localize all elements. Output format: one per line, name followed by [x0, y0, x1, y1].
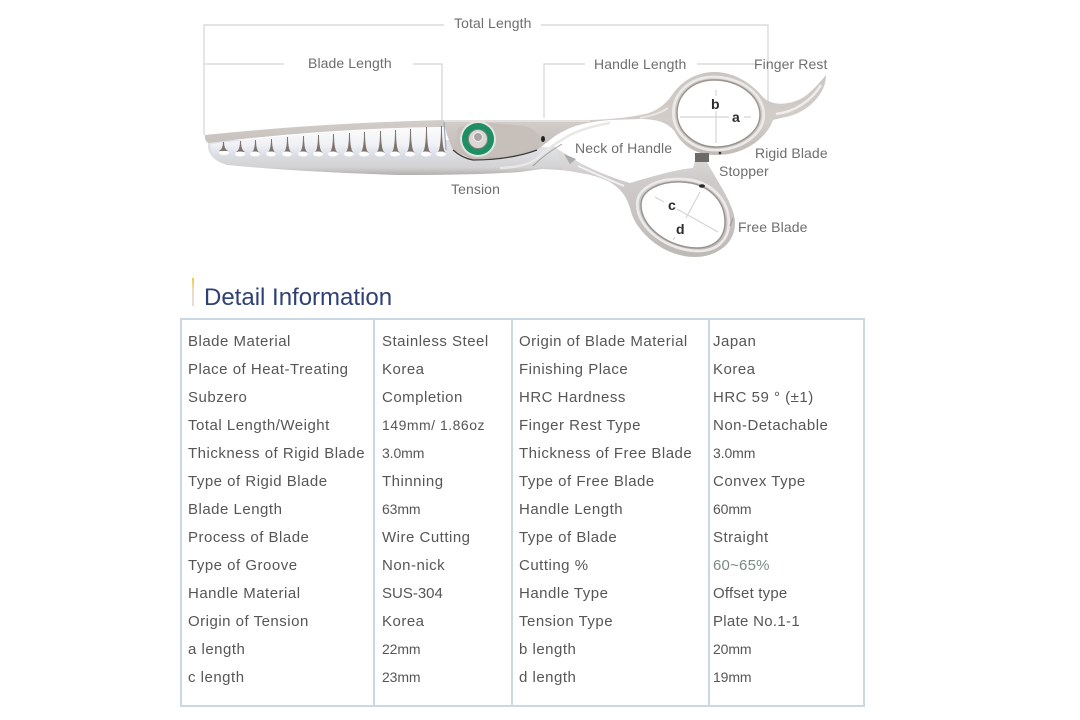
row: groove: 60~65%: [713, 557, 770, 574]
label: Handle Length: Handle Length: [594, 56, 686, 72]
row: process: [188, 529, 769, 546]
row: process: Process of Blade: [188, 529, 309, 546]
free blade and lower handle: [208, 140, 735, 257]
label: Free Blade: Free Blade: [738, 219, 808, 235]
row: subzero: Subzero: [188, 389, 247, 406]
row: subzero: HRC Hardness: [519, 389, 626, 406]
row: blade type: [188, 473, 806, 490]
dimension lines: [204, 25, 768, 240]
row: tension: Origin of Tension: [188, 613, 309, 630]
row: thickness: Thickness of Rigid Blade: [188, 445, 365, 462]
row: tension: [188, 613, 800, 630]
row: total length: Finger Rest Type: [519, 417, 641, 434]
row: subzero: [188, 389, 814, 406]
row: process: Type of Blade: [519, 529, 617, 546]
row: lengths: Blade Length: [188, 501, 282, 518]
row: handle: [188, 585, 787, 602]
row: process: Straight: [713, 529, 769, 546]
label: Finger Rest: Finger Rest: [754, 56, 827, 72]
row: blade material: Stainless Steel: [382, 333, 489, 350]
row: tension: Tension Type: [519, 613, 613, 630]
row: total length: [188, 417, 828, 434]
row: blade type: Type of Free Blade: [519, 473, 655, 490]
row: blade material: Japan: [713, 333, 756, 350]
row: a and b length: 22mm: [382, 641, 420, 657]
row: groove: Cutting %: [519, 557, 589, 574]
row: c and d length: 19mm: [713, 669, 752, 685]
row: blade type: Thinning: [382, 473, 444, 490]
row: total length: 149mm/ 1.86oz: [382, 417, 485, 433]
row: heat treating: Place of Heat-Treating: [188, 361, 349, 378]
label: Neck of Handle: Neck of Handle: [575, 140, 672, 156]
label: Blade Length: Blade Length: [308, 55, 392, 71]
row: c and d length: d length: [519, 669, 576, 686]
row: process: Wire Cutting: [382, 529, 471, 546]
rigid blade and upper handle: [205, 72, 826, 160]
heading accent tick: [192, 278, 194, 306]
row: handle: Offset type: [713, 585, 787, 602]
row: tension: Korea: [382, 613, 425, 630]
row: thickness: 3.0mm: [382, 445, 424, 461]
row: groove: Non-nick: [382, 557, 445, 574]
tension screw: [455, 121, 545, 158]
row: groove: [188, 557, 770, 574]
row: a and b length: b length: [519, 641, 576, 658]
row: handle: SUS-304: [382, 585, 443, 602]
row: handle: Handle Type: [519, 585, 608, 602]
row: blade material: [188, 333, 756, 350]
label: d: d: [676, 221, 685, 237]
heading: Detail Information: Detail Information: [204, 284, 392, 311]
row: heat treating: Korea: [713, 361, 756, 378]
row: blade material: Blade Material: [188, 333, 291, 350]
row: c and d length: c length: [188, 669, 245, 686]
row: a and b length: 20mm: [713, 641, 752, 657]
row: heat treating: [188, 361, 756, 378]
row: blade type: Type of Rigid Blade: [188, 473, 328, 490]
row: lengths: Handle Length: [519, 501, 623, 518]
row: blade material: Origin of Blade Material: [519, 333, 688, 350]
row: thickness: Thickness of Free Blade: [519, 445, 692, 462]
label: b: b: [711, 96, 720, 112]
thinning teeth: [210, 122, 446, 158]
row: tension: Plate No.1-1: [713, 613, 800, 630]
specification table: [180, 318, 865, 707]
row: lengths: 63mm: [382, 501, 420, 517]
label: c: c: [668, 197, 676, 213]
neck detail: [453, 123, 610, 168]
row: blade type: Convex Type: [713, 473, 806, 490]
label: Tension: Tension: [451, 181, 500, 197]
row: a and b length: a length: [188, 641, 245, 658]
row: total length: Total Length/Weight: [188, 417, 330, 434]
row: a and b length: [188, 641, 752, 658]
row: thickness: 3.0mm: [713, 445, 755, 461]
label: Rigid Blade: Rigid Blade: [755, 145, 828, 161]
row: heat treating: Finishing Place: [519, 361, 628, 378]
row: handle: Handle Material: [188, 585, 301, 602]
row: lengths: [188, 501, 752, 518]
row: groove: Type of Groove: [188, 557, 298, 574]
row: thickness: [188, 445, 755, 462]
label: Stopper: Stopper: [719, 163, 769, 179]
row: c and d length: [188, 669, 752, 686]
row: lengths: 60mm: [713, 501, 752, 517]
stopper: [695, 152, 721, 162]
label: a: a: [732, 109, 740, 125]
row: c and d length: 23mm: [382, 669, 420, 685]
row: subzero: HRC 59 ° (±1): [713, 389, 814, 406]
row: heat treating: Korea: [382, 361, 425, 378]
row: subzero: Completion: [382, 389, 463, 406]
scissors diagram: [203, 15, 828, 257]
row: total length: Non-Detachable: [713, 417, 828, 434]
label: Total Length: Total Length: [454, 15, 531, 31]
